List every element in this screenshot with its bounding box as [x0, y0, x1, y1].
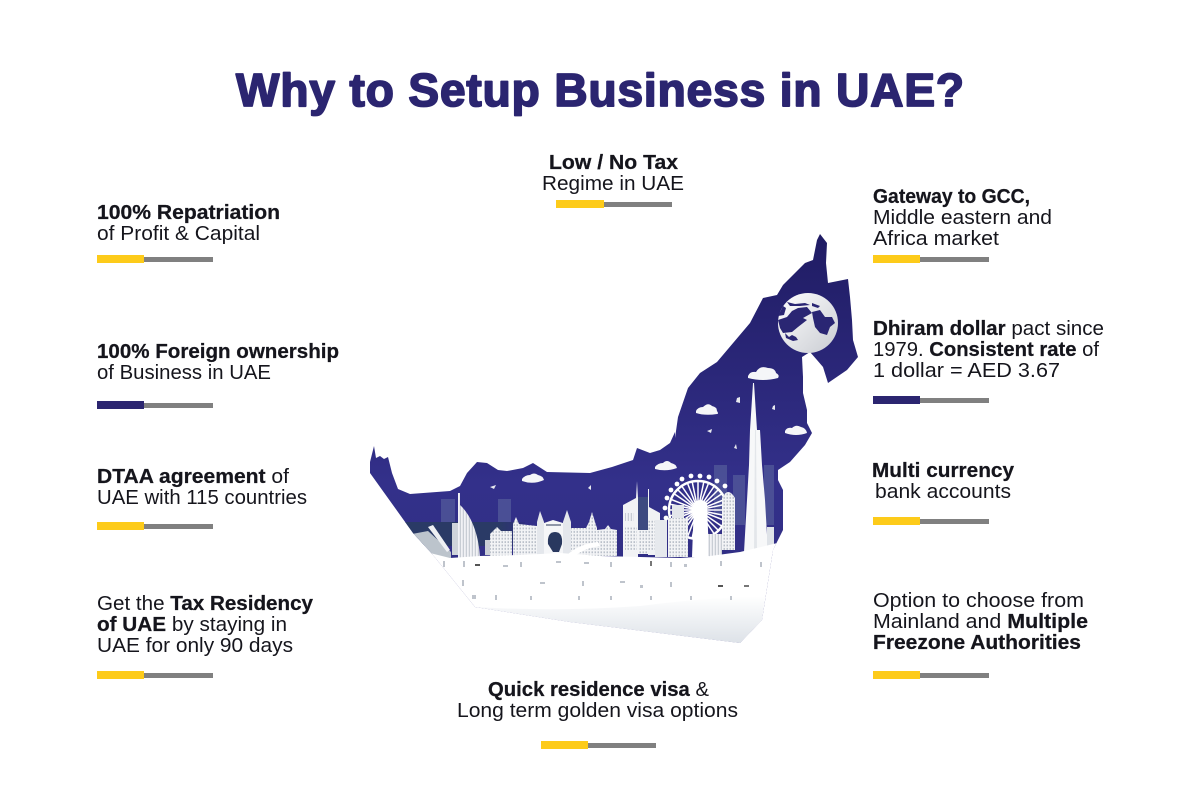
map of UAE with skyline	[360, 225, 870, 655]
item: multi currency: Multi currency	[872, 460, 1015, 482]
item: freezone options: Option to choose from	[873, 590, 1084, 612]
item: residence visa	[457, 679, 738, 749]
item: low no tax: Regime in UAE	[542, 173, 684, 195]
item: freezone options: Mainland and Multiple	[873, 611, 1088, 633]
item: DTAA agreement	[97, 466, 307, 530]
item: repatriation: 100% Repatriation	[97, 202, 280, 224]
item: low no tax: Low / No Tax	[549, 152, 678, 174]
item: tax residency	[97, 593, 314, 679]
moon	[778, 293, 838, 353]
item: freezone options	[873, 590, 1088, 679]
item: multi currency	[872, 460, 1015, 525]
item: gateway to GCC: Middle eastern and	[873, 207, 1052, 229]
ferris wheel	[663, 474, 735, 557]
item: repatriation: of Profit & Capital	[97, 223, 260, 245]
skyline: Atlantis	[490, 510, 617, 558]
item: dirham dollar pact: 1979. Consistent rate of	[873, 339, 1099, 361]
birds	[490, 397, 775, 490]
item: foreign ownership: of Business in UAE	[97, 362, 271, 384]
item: DTAA agreement: UAE with 115 countries	[97, 487, 307, 509]
skyline: Burj Al Arab and west	[412, 493, 491, 560]
snow city ground	[432, 543, 776, 643]
faded background towers	[441, 465, 774, 525]
Burj tower	[744, 383, 774, 552]
item: tax residency: Get the Tax Residency	[97, 593, 314, 615]
title: Why to Setup Business in UAE?	[236, 64, 964, 116]
windows	[443, 561, 762, 600]
item: gateway to GCC: Africa market	[873, 228, 999, 250]
night sky	[360, 225, 870, 655]
item: tax residency: UAE for only 90 days	[97, 635, 293, 657]
item: low no tax	[542, 152, 684, 208]
item: foreign ownership: 100% Foreign ownership	[97, 341, 339, 363]
item: residence visa: Long term golden visa options	[457, 700, 738, 722]
item: dirham dollar pact	[873, 318, 1104, 404]
item: dirham dollar pact: Dhiram dollar pact since	[873, 318, 1104, 340]
item: residence visa: Quick residence visa &	[488, 679, 710, 701]
clouds	[522, 367, 807, 483]
item: gateway to GCC	[873, 186, 1052, 263]
skyline: downtown towers	[623, 481, 667, 557]
item: foreign ownership	[97, 341, 339, 409]
item: multi currency: bank accounts	[875, 481, 1011, 503]
item: DTAA agreement: DTAA agreement of	[97, 466, 289, 488]
item: dirham dollar pact: 1 dollar = AED 3.67	[873, 360, 1060, 382]
item: tax residency: of UAE by staying in	[97, 614, 287, 636]
item: freezone options: Freezone Authorities	[873, 632, 1081, 654]
item: repatriation	[97, 202, 280, 263]
item: gateway to GCC: Gateway to GCC,	[873, 186, 1030, 208]
